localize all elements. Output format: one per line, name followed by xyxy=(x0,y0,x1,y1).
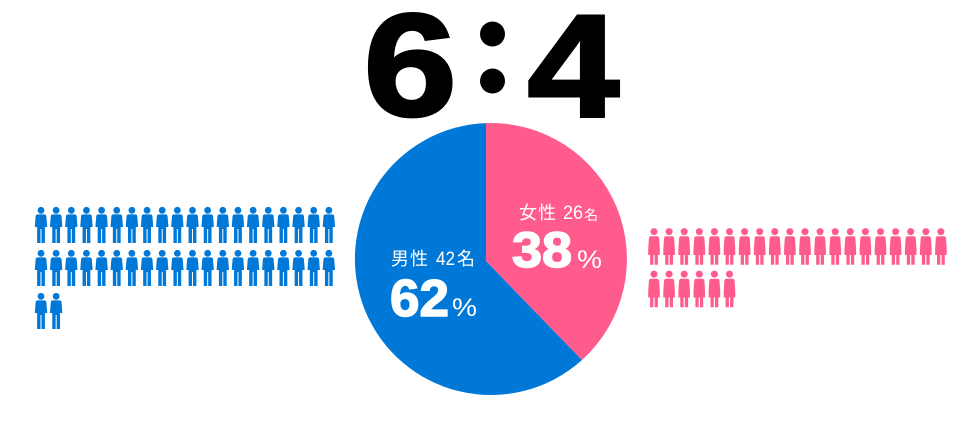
label: men: 62 xyxy=(390,269,449,328)
label: men: % xyxy=(452,294,477,322)
label: women: 性 xyxy=(538,203,556,223)
label: women: 女 xyxy=(519,203,537,223)
pictogram: 26 women xyxy=(648,228,947,307)
title: ratio 6:4 xyxy=(364,0,619,148)
label: women: 名 xyxy=(584,207,598,223)
pie slice: women 38% xyxy=(486,123,627,360)
label: women xyxy=(512,203,602,279)
label: men: 性 xyxy=(410,249,428,269)
label: men: 名 xyxy=(457,249,475,269)
label: men xyxy=(390,249,477,328)
label: men: 男 xyxy=(391,249,409,269)
pictogram: 42 men xyxy=(35,207,335,329)
label: women: 38 xyxy=(512,223,572,279)
pie slice: men 62% xyxy=(355,123,582,395)
label: women: 26 xyxy=(563,203,583,224)
label: women: % xyxy=(577,246,602,274)
label: men: 42 xyxy=(436,249,455,270)
pie chart xyxy=(355,123,627,395)
